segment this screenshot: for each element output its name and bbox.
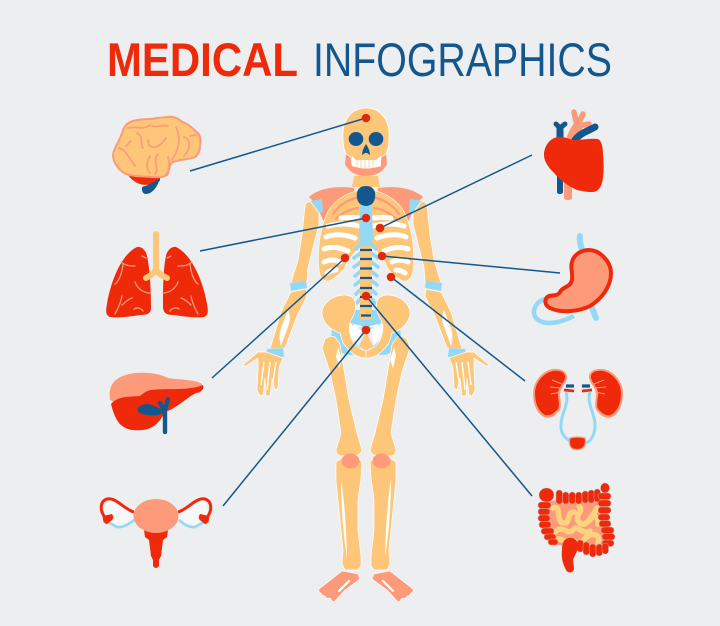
sternum (359, 206, 373, 248)
neck (352, 176, 380, 187)
thyroid (357, 186, 375, 206)
right half of skeleton (366, 187, 489, 602)
icon: brain (113, 117, 201, 194)
icon: intestine (538, 483, 615, 572)
icon: uterus (101, 499, 211, 568)
skeleton (243, 108, 489, 602)
spine (360, 246, 372, 320)
skull (343, 108, 389, 176)
icon: liver (110, 373, 203, 432)
icon: stomach (534, 236, 611, 323)
title: MEDICAL (107, 33, 298, 86)
title: INFOGRAPHICS (313, 33, 612, 86)
icon: kidneys (533, 369, 623, 450)
icon: heart (544, 112, 604, 200)
callout lines and markers (190, 114, 560, 506)
icon: lungs (106, 234, 208, 317)
left half of skeleton (243, 187, 366, 602)
title (107, 33, 612, 86)
